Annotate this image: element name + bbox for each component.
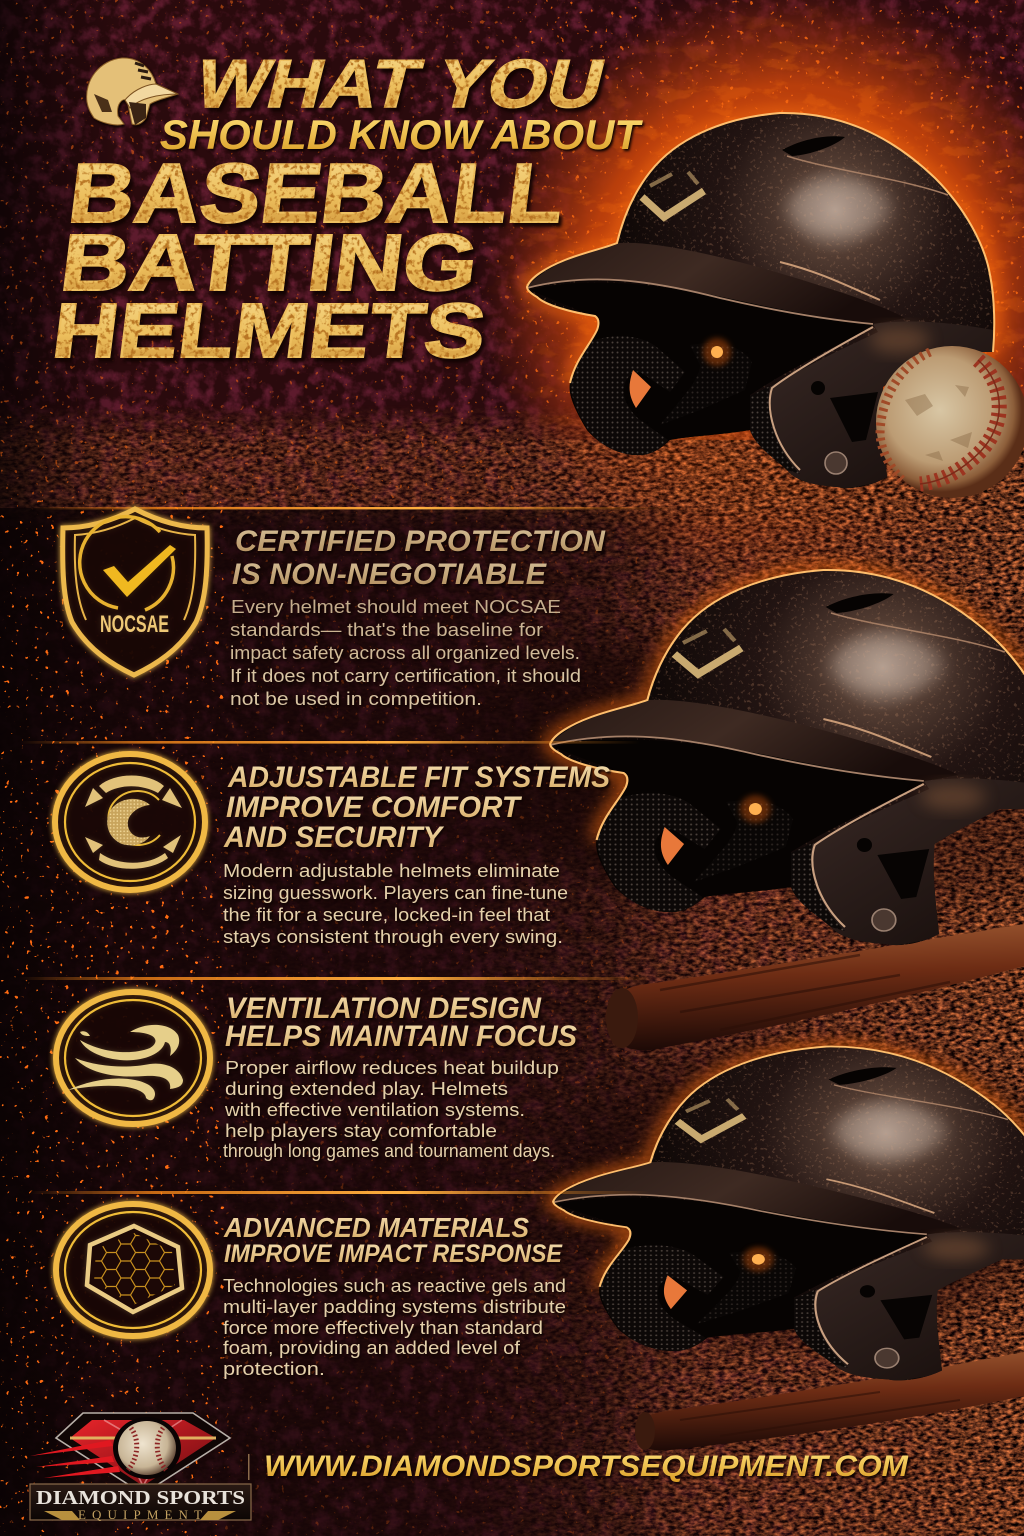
heading: IS NON-NEGOTIABLE: [232, 558, 547, 591]
body text: help players stay comfortable: [225, 1120, 497, 1141]
icon: small gold helmet: [87, 58, 178, 125]
heading: CERTIFIED PROTECTION: [235, 525, 606, 558]
body text: Every helmet should meet NOCSAE: [231, 596, 561, 617]
body text: [230, 596, 581, 709]
baseball bat, middle: [606, 924, 1024, 1050]
divider beside logo: [248, 1454, 250, 1480]
heading: HELPS MAINTAIN FOCUS: [225, 1020, 577, 1053]
body text: not be used in competition.: [230, 688, 482, 709]
panel: adjustable fit: [55, 754, 610, 947]
icon: NOCSAE shield: [63, 509, 207, 675]
body text: Proper airflow reduces heat buildup: [225, 1057, 559, 1078]
title line: Baseball: BASEBALL: [64, 146, 569, 240]
body text: force more effectively than standard: [223, 1317, 543, 1338]
body text: [223, 1275, 566, 1379]
panel: advanced materials: [56, 1204, 566, 1379]
body text: stays consistent through every swing.: [223, 926, 563, 947]
heading: [223, 1212, 563, 1268]
body text: protection.: [223, 1358, 325, 1379]
heading: IMPROVE IMPACT RESPONSE: [224, 1240, 563, 1268]
body text: during extended play. Helmets: [225, 1078, 508, 1099]
heading: AND SECURITY: [223, 821, 445, 854]
body text: [223, 1057, 559, 1161]
panel: ventilation: [56, 992, 577, 1161]
website url: WWW.DIAMONDSPORTSEQUIPMENT.COM: [264, 1450, 909, 1483]
heading: VENTILATION DESIGN: [226, 992, 542, 1025]
logo banner: EQUIPMENT: [78, 1507, 202, 1522]
helmet illustration, top: [520, 105, 1000, 495]
logo diamond with baseball: [30, 1413, 230, 1494]
heading: ADJUSTABLE FIT SYSTEMS: [227, 761, 610, 794]
logo: Diamond Sports Equipment: [30, 1413, 251, 1522]
icon: adjustable fit dial: [55, 754, 205, 890]
title: [48, 45, 612, 374]
logo banner: [30, 1484, 251, 1522]
body text: impact safety across all organized levels.: [230, 642, 580, 663]
heading: ADVANCED MATERIALS: [223, 1212, 529, 1243]
body text: Modern adjustable helmets eliminate: [223, 860, 560, 881]
heading: [225, 992, 577, 1053]
body text: multi-layer padding systems distribute: [223, 1296, 566, 1317]
title line: What You: WHAT YOU: [188, 45, 612, 122]
title line: Helmets: HELMETS: [48, 288, 490, 374]
icon: honeycomb hexagon: [56, 1204, 210, 1336]
heading: [223, 761, 610, 854]
body text: Technologies such as reactive gels and: [223, 1275, 566, 1296]
body text: the fit for a secure, locked-in feel that: [223, 904, 550, 925]
heading: IMPROVE COMFORT: [226, 791, 523, 824]
logo banner: DIAMOND SPORTS: [36, 1487, 245, 1509]
helmet illustration, middle: [543, 562, 1024, 952]
body text: through long games and tournament days.: [223, 1140, 555, 1161]
body text: with effective ventilation systems.: [224, 1099, 525, 1120]
baseball: [876, 346, 1024, 498]
helmet illustration, bottom: [546, 1039, 1024, 1387]
icon: NOCSAE shield: NOCSAE: [100, 611, 169, 638]
subtitle: SHOULD KNOW ABOUT: [160, 111, 643, 158]
body text: sizing guesswork. Players can fine-tune: [223, 882, 568, 903]
body text: If it does not carry certification, it should: [230, 665, 581, 686]
baseball bat, lower: [635, 1352, 1024, 1450]
icon: airflow swirl: [56, 992, 210, 1124]
title line: Batting: BATTING: [56, 218, 483, 308]
panel: certified protection: [63, 509, 606, 709]
body text: foam, providing an added level of: [223, 1337, 521, 1358]
section divider lines: [20, 507, 680, 1194]
body text: [223, 860, 568, 947]
body text: standards— that's the baseline for: [230, 619, 543, 640]
heading: [232, 525, 606, 591]
